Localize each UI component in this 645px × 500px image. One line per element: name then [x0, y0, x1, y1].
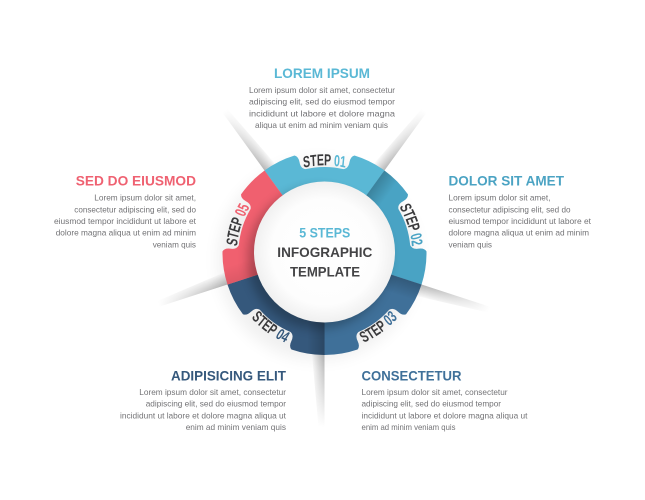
- segment: step 04: [219, 257, 345, 367]
- text block: dolor sit amet: DOLOR SIT AMET: [448, 172, 564, 188]
- segment: step 03: [304, 257, 430, 367]
- text block: sed do eiusmod: Lorem ipsum dolor sit amet,: [94, 193, 196, 203]
- text block: sed do eiusmod: [54, 172, 197, 249]
- label: step 03: STEP 03: [360, 311, 396, 342]
- beam: bottom: [313, 354, 324, 419]
- center title: 5 STEPS: [299, 224, 350, 240]
- ring drop shadow: [218, 160, 418, 360]
- text block: lorem ipsum: adipiscing elit, sed do eiusmod tempor: [249, 96, 395, 106]
- text block: lorem ipsum: LOREM IPSUM: [274, 65, 370, 81]
- text block: adipisicing elit: adipiscing elit, sed do eiusmod tempor: [146, 399, 286, 409]
- text block: consectetur: enim ad minim veniam quis: [362, 422, 456, 432]
- text block: dolor sit amet: dolore magna aliqua ut enim ad minim: [448, 228, 589, 238]
- beam: upper right: [375, 118, 422, 170]
- segment: step 05: [213, 166, 297, 295]
- segmented ring: [222, 156, 426, 355]
- center title: TEMPLATE: [290, 264, 360, 280]
- text block: consectetur: Lorem ipsum dolor sit amet, consectetur: [362, 387, 508, 397]
- center disc shadow on ring: [248, 187, 390, 329]
- text block: sed do eiusmod: veniam quis: [153, 239, 196, 249]
- text block: dolor sit amet: [448, 172, 592, 249]
- beam: right: [418, 284, 482, 308]
- center disc: [254, 182, 395, 322]
- text block: consectetur: incididunt ut labore et dolore magna aliqua ut: [362, 410, 528, 420]
- center title: [277, 224, 372, 280]
- text block: lorem ipsum: incididunt ut labore et dolore magna: [249, 108, 395, 118]
- text block: lorem ipsum: aliqua ut enim ad minim veniam quis: [255, 120, 388, 130]
- text block: lorem ipsum: Lorem ipsum dolor sit amet, consectetur: [249, 85, 395, 95]
- text block: adipisicing elit: [120, 368, 287, 432]
- text block: dolor sit amet: consectetur adipiscing elit, sed do: [448, 204, 571, 214]
- text block: adipisicing elit: ADIPISICING ELIT: [171, 368, 286, 384]
- text block: consectetur: [362, 368, 528, 432]
- beam: upper left: [228, 118, 274, 170]
- label: step 05: STEP 05: [226, 203, 249, 246]
- infographic: [54, 68, 591, 432]
- text block: consectetur: CONSECTETUR: [362, 368, 462, 384]
- text block: sed do eiusmod: dolore magna aliqua ut enim ad minim: [56, 228, 196, 238]
- beam: left: [167, 274, 228, 304]
- center title: INFOGRAPHIC: [277, 244, 372, 260]
- text block: adipisicing elit: Lorem ipsum dolor sit amet, consectetur: [139, 387, 286, 397]
- segment: step 01: [264, 156, 384, 204]
- text block: dolor sit amet: eiusmod tempor incididunt ut labore et: [448, 216, 592, 226]
- text block: lorem ipsum: [249, 65, 395, 130]
- text block: sed do eiusmod: eiusmod tempor incididunt ut labore et: [54, 216, 197, 226]
- label: step 04: STEP 04: [252, 311, 290, 342]
- text block: dolor sit amet: Lorem ipsum dolor sit amet,: [448, 193, 550, 203]
- step labels: [226, 154, 422, 342]
- segment: step 02: [352, 166, 436, 295]
- beam shadows: [167, 118, 482, 419]
- text block: adipisicing elit: incididunt ut labore et dolore magna aliqua ut: [120, 410, 287, 420]
- text block: adipisicing elit: enim ad minim veniam quis: [186, 422, 286, 432]
- text block: sed do eiusmod: consectetur adipiscing elit, sed do: [74, 204, 196, 214]
- label: step 01: STEP 01: [303, 154, 346, 168]
- text block: sed do eiusmod: SED DO EIUSMOD: [76, 172, 196, 188]
- text block: dolor sit amet: veniam quis: [448, 239, 492, 249]
- label: step 02: STEP 02: [400, 204, 422, 246]
- text block: consectetur: adipiscing elit, sed do eiusmod tempor: [362, 399, 501, 409]
